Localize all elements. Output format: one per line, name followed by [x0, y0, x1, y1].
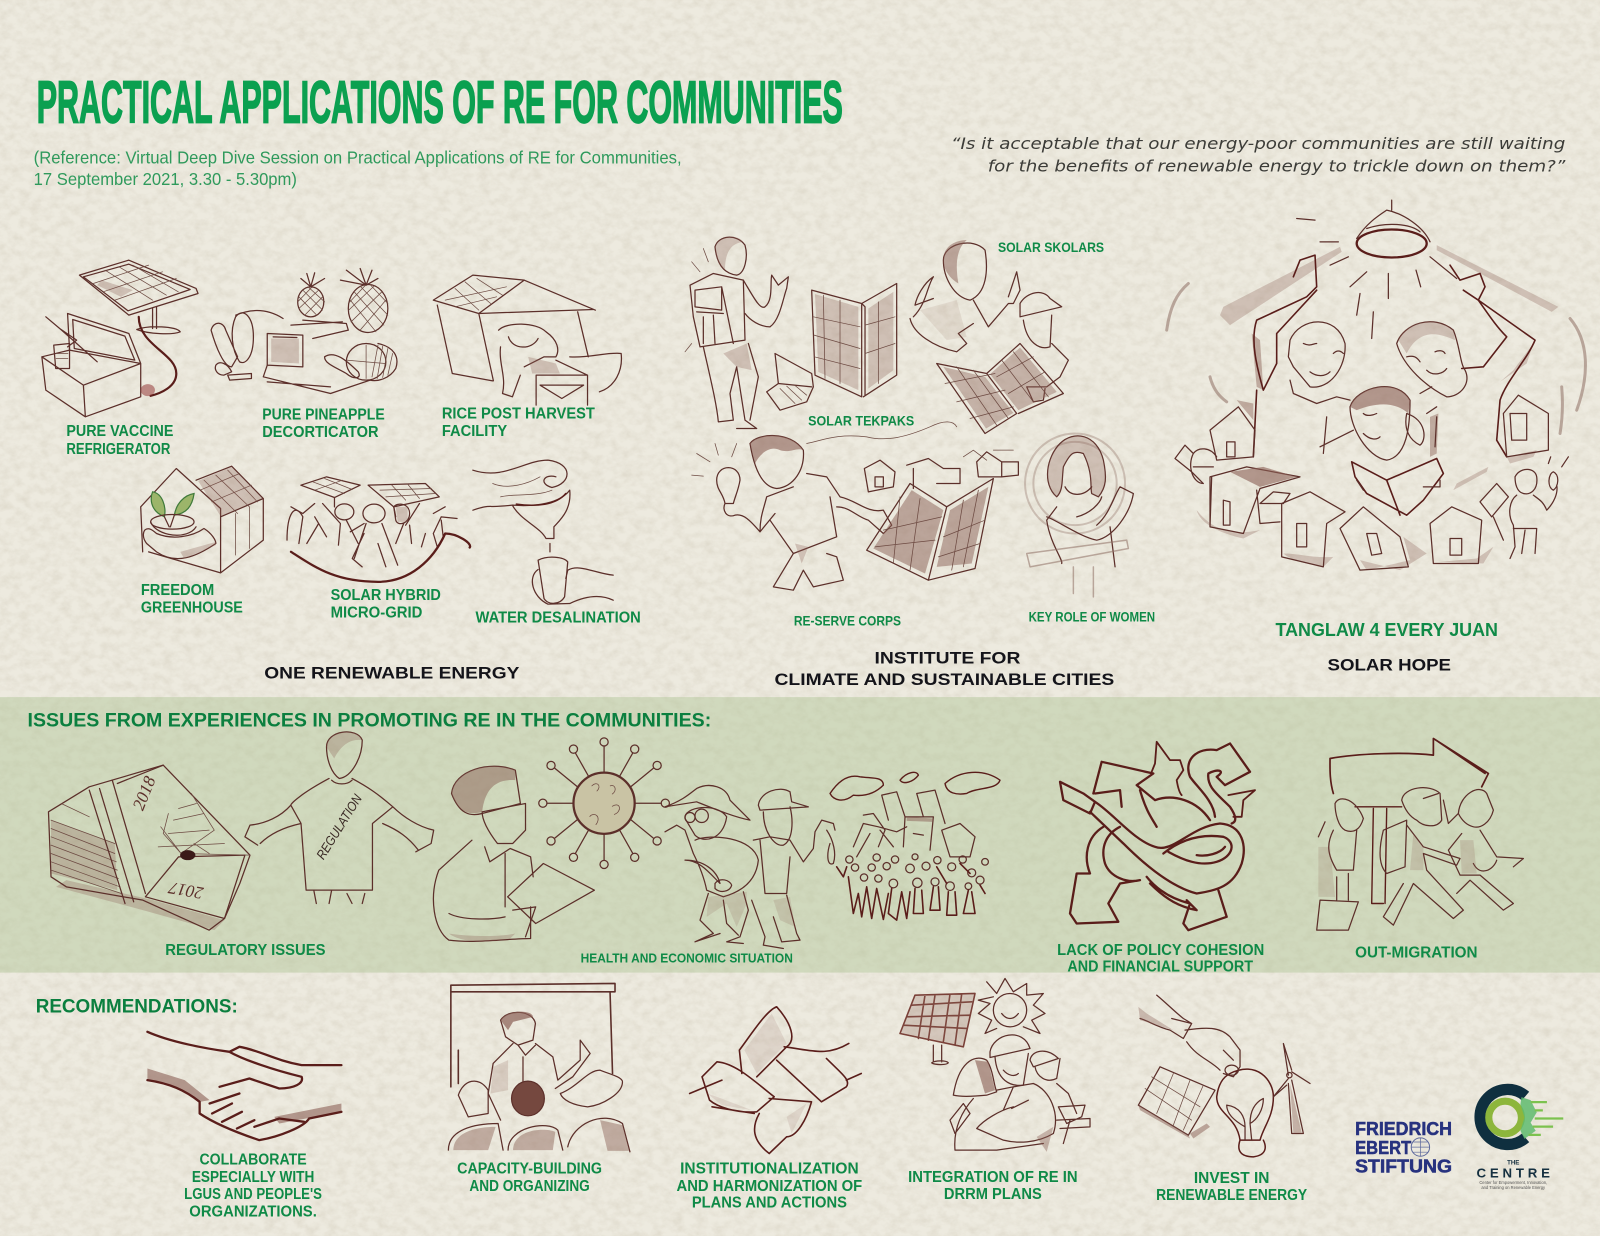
icon: two farmers [665, 786, 835, 948]
label: collaborate: COLLABORATE [199, 1151, 307, 1168]
label: solar skolars: SOLAR SKOLARS [998, 240, 1104, 256]
heading: issues: ISSUES FROM EXPERIENCES IN PROMOTING RE IN THE COMMUNITIES: [28, 710, 711, 732]
logo: The Centre: THE [1507, 1159, 1519, 1166]
book [1352, 459, 1443, 515]
label: solar hybrid micro-grid: MICRO-GRID [331, 604, 422, 621]
label: institutionalization: PLANS AND ACTIONS [692, 1194, 847, 1211]
label: institutionalization: AND HARMONIZATION OF [677, 1178, 862, 1195]
label: institutionalization: INSTITUTIONALIZATION [680, 1161, 859, 1178]
quote: “Is it acceptable that our energy-poor communities are still waiting [951, 134, 1565, 153]
icon: solar skolars boy with panel [937, 293, 1068, 433]
icon: regulatory books with cobweb [48, 765, 250, 930]
logo: The Centre: CENTRE [1477, 1166, 1550, 1181]
logo: The Centre: Center for Empowerment, Innovation, [1479, 1180, 1547, 1185]
icon: masked man with document [433, 766, 594, 941]
icon: large solar panel [867, 479, 993, 580]
label: out-migration: OUT-MIGRATION [1355, 944, 1478, 961]
icon: man with backpack [685, 237, 788, 428]
icon: interlocked hands [690, 1007, 861, 1153]
icon: regulation person: REGULATION [313, 791, 365, 862]
label: integration of RE in DRRM plans: DRRM PLANS [944, 1186, 1042, 1203]
icon: coronavirus [539, 738, 669, 869]
icon: handshake [147, 1032, 341, 1140]
label: lack of policy cohesion and financial support: AND FINANCIAL SUPPORT [1067, 959, 1254, 976]
icon: out-migration [1317, 738, 1523, 930]
label: integration of RE in DRRM plans: INTEGRATION OF RE IN [908, 1169, 1078, 1186]
reference note: 17 September 2021, 3.30 - 5.30pm) [34, 169, 297, 189]
icon: solar tekpak laptop [767, 353, 813, 410]
icon: tangled arrows [1060, 742, 1255, 930]
logo: Friedrich Ebert Stiftung: EBERT [1355, 1137, 1412, 1158]
label: solar tekpaks: SOLAR TEKPAKS [808, 414, 914, 430]
label: health and economic situation: HEALTH AND ECONOMIC SITUATION [581, 950, 793, 965]
logo: The Centre [1477, 1089, 1563, 1190]
label: tanglaw 4 every juan: TANGLAW 4 EVERY JUAN [1276, 619, 1498, 640]
icon: factories and crowd [830, 772, 1000, 920]
label: PURE vaccine refrigerator: REFRIGERATOR [66, 441, 170, 458]
icon: solar hybrid micro-grid [287, 477, 470, 582]
label: regulatory issues: REGULATORY ISSUES [165, 942, 326, 959]
heading: institute for climate and sustainable cities: INSTITUTE FOR [874, 648, 1020, 667]
label: lack of policy cohesion and financial support: LACK OF POLICY COHESION [1057, 942, 1264, 959]
label: water desalination: WATER DESALINATION [476, 610, 641, 627]
icon: pure pineapple decorticator [211, 268, 397, 393]
label: collaborate: ESPECIALLY WITH [192, 1169, 314, 1186]
raised arms [1253, 255, 1317, 457]
icon: regulatory books with cobweb: 2018 [129, 773, 160, 813]
heading: recommendations: RECOMMENDATIONS: [36, 995, 238, 1017]
label: rice post harvest facility: RICE POST HARVEST [442, 406, 596, 423]
label: freedom greenhouse: GREENHOUSE [141, 599, 243, 616]
reference note: (Reference: Virtual Deep Dive Session on Practical Applications of RE for Communities, [34, 147, 682, 167]
heading: solar hope: SOLAR HOPE [1328, 656, 1451, 675]
man right with bulb [1510, 457, 1568, 559]
faces [1288, 322, 1350, 403]
icon: water desalination [473, 460, 613, 604]
label: collaborate: LGUS AND PEOPLE'S [184, 1186, 322, 1203]
icon: woman, key role [1025, 433, 1133, 597]
label: capacity-building: AND ORGANIZING [469, 1178, 590, 1195]
houses [1210, 407, 1300, 534]
icon: solar panel, sun and workers [900, 978, 1090, 1152]
icon: training room [448, 983, 630, 1152]
icon: folded solar panel [812, 283, 897, 397]
logo: The Centre: and Training on Renewable Energy [1481, 1185, 1546, 1190]
icon: man with lightbulb [692, 436, 892, 590]
title: PRACTICAL APPLICATIONS OF RE FOR COMMUNITIES [37, 69, 843, 136]
label: key role of women: KEY ROLE OF WOMEN [1029, 610, 1155, 625]
label: pure pineapple decorticator: DECORTICATOR [262, 424, 379, 441]
label: collaborate: ORGANIZATIONS. [189, 1203, 317, 1220]
label: PURE vaccine refrigerator: PURE VACCINE [66, 423, 173, 440]
label: invest in renewable energy: RENEWABLE ENERGY [1156, 1187, 1307, 1204]
label: pure pineapple decorticator: PURE PINEAPPLE [262, 407, 385, 424]
quote: for the benefits of renewable energy to trickle down on them?” [988, 157, 1566, 176]
logo: Friedrich Ebert Stiftung: FRIEDRICH [1355, 1118, 1452, 1139]
logo: Friedrich Ebert Stiftung: STIFTUNG [1355, 1156, 1452, 1177]
logo: Friedrich Ebert Stiftung [1355, 1118, 1452, 1177]
icon: solar hope family under lamp [1167, 200, 1585, 570]
label: capacity-building: CAPACITY-BUILDING [457, 1161, 602, 1178]
heading: one renewable energy: ONE RENEWABLE ENERGY [264, 664, 519, 683]
lamp [1357, 229, 1427, 257]
icon: PURE vaccine refrigerator [42, 260, 198, 417]
icon: regulatory books with cobweb: 2017 [166, 878, 205, 903]
icon: rice post harvest facility [433, 275, 621, 405]
label: freedom greenhouse: FREEDOM [141, 582, 214, 599]
label: solar hybrid micro-grid: SOLAR HYBRID [331, 587, 441, 604]
washes and arcs [1197, 245, 1558, 570]
icon: invest: hand, coin, bulb, panel, wind turbine [1138, 995, 1310, 1157]
icon: regulation person [245, 732, 434, 903]
icon: solar skolars girl [910, 240, 1020, 352]
label: re-serve corps: RE-SERVE CORPS [794, 614, 901, 630]
band: issues background [0, 697, 1600, 973]
heading: institute for climate and sustainable cities: CLIMATE AND SUSTAINABLE CITIES [774, 670, 1114, 689]
icon: freedom greenhouse [141, 466, 263, 573]
label: invest in renewable energy: INVEST IN [1194, 1170, 1269, 1187]
child left [1175, 445, 1217, 484]
label: rice post harvest facility: FACILITY [442, 423, 507, 440]
icon: village houses behind panel [807, 422, 1018, 492]
